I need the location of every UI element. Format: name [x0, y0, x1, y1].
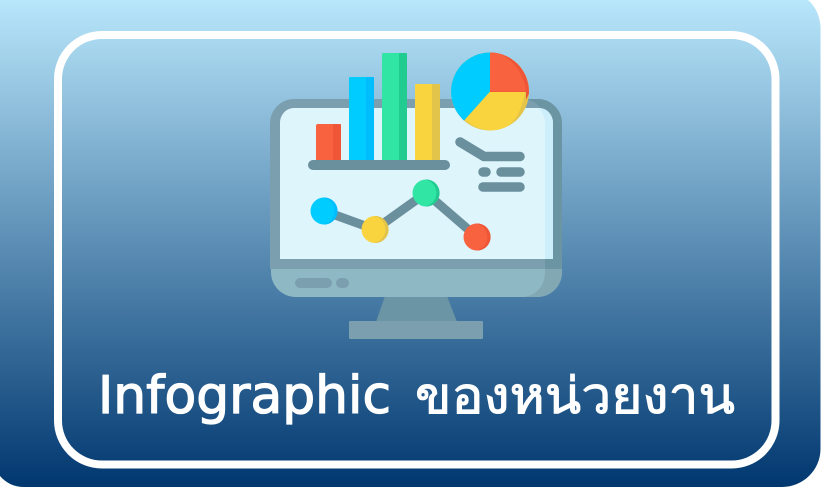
white rounded frame	[58, 35, 776, 464]
monitor screen	[280, 108, 553, 259]
monitor chin	[271, 269, 562, 297]
monitor stand	[376, 296, 457, 322]
chin indicators	[295, 278, 349, 288]
legend lines	[460, 142, 520, 187]
monitor base	[349, 321, 483, 339]
title: ของหน่วยงาน	[415, 367, 735, 425]
line chart	[310, 180, 491, 250]
bar chart	[308, 53, 450, 170]
pie chart	[450, 52, 530, 132]
title: Infographic	[98, 366, 391, 426]
monitor bezel	[270, 99, 562, 269]
icon: computer monitor with charts	[270, 52, 562, 339]
